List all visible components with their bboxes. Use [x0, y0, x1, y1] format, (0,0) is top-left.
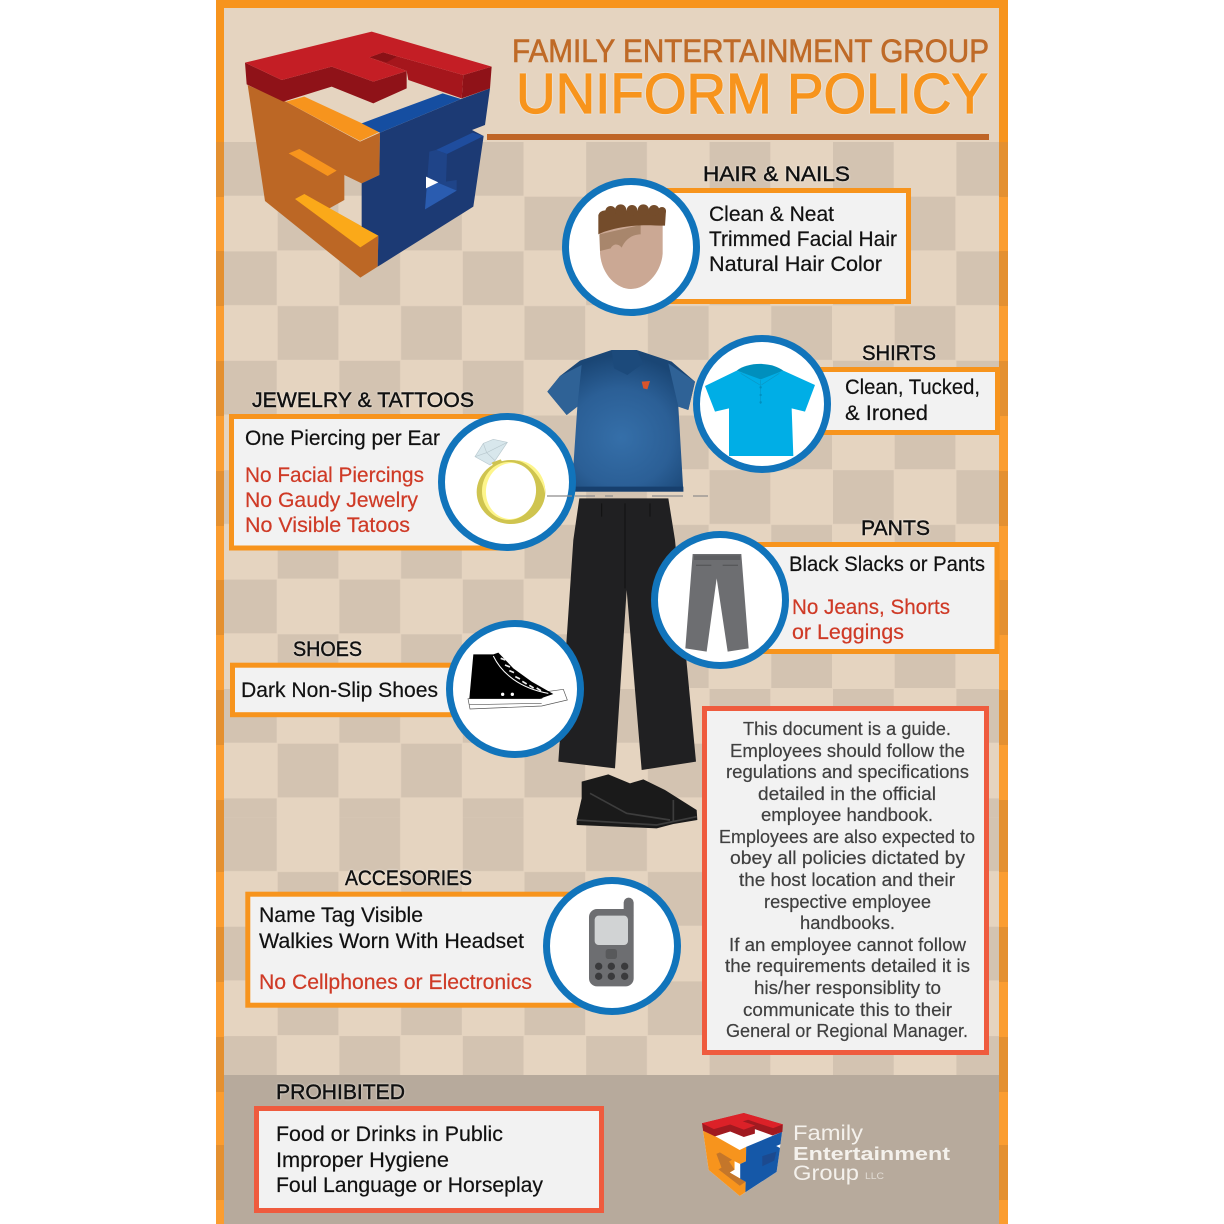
logo mark [702, 1113, 783, 1196]
panel: jewelry & tattoos [232, 388, 572, 548]
heading: PANTS [861, 516, 930, 540]
heading: SHOES [293, 637, 362, 661]
guide text: Employees should follow the [730, 740, 965, 761]
text: Improper Hygiene [276, 1148, 449, 1172]
text [259, 903, 532, 994]
text: Trimmed Facial Hair [709, 227, 897, 251]
text: & Ironed [845, 401, 928, 425]
page background [216, 0, 1008, 1224]
text [845, 375, 980, 425]
text [245, 426, 440, 537]
text: No Jeans, Shorts [792, 595, 950, 619]
guide text: Employees are also expected to [719, 826, 975, 847]
logo: FEG cube [245, 32, 492, 278]
heading: HAIR & NAILS [703, 162, 850, 186]
guide text: obey all policies dictated by [730, 847, 966, 868]
ring pointer line [547, 495, 572, 497]
guide text: This document is a guide. [743, 718, 951, 739]
text [709, 202, 897, 276]
wordmark [793, 1122, 950, 1185]
photo: polo shirt [547, 350, 695, 492]
text: Walkies Worn With Headset [259, 929, 524, 953]
title line 2: UNIFORM POLICY [516, 62, 988, 126]
wordmark: Family [793, 1122, 864, 1145]
guide text: the host location and their [739, 869, 955, 890]
photo: dashed line [575, 495, 708, 497]
icon: ring [442, 416, 572, 548]
heading: PROHIBITED [276, 1080, 405, 1104]
guide text: If an employee cannot follow [729, 934, 967, 955]
text: Natural Hair Color [709, 252, 882, 276]
panel: accessories [248, 866, 678, 1012]
box [704, 708, 986, 1052]
title [512, 33, 989, 126]
panel: shoes [232, 624, 580, 754]
guide text: respective employee [764, 891, 931, 912]
panel: shirts [696, 338, 998, 470]
box [642, 190, 908, 302]
panel: pants [654, 516, 997, 666]
box [256, 1108, 602, 1210]
box [232, 416, 508, 548]
wordmark: LLC [865, 1171, 885, 1181]
text: Dark Non-Slip Shoes [241, 678, 438, 702]
text: Clean, Tucked, [845, 375, 980, 399]
title line 1: FAMILY ENTERTAINMENT GROUP [512, 33, 989, 69]
panel: guide note [704, 708, 986, 1052]
guide text: detailed in the official [758, 783, 936, 804]
wordmark: Group [793, 1162, 859, 1185]
icon: sneaker [450, 624, 580, 754]
box [248, 894, 598, 1005]
icon: head [566, 182, 696, 312]
panel: hair & nails [566, 162, 908, 312]
guide text: handbooks. [800, 912, 895, 933]
guide text: communicate this to their [743, 999, 952, 1020]
text: One Piercing per Ear [245, 426, 440, 450]
guide text: his/her responsiblity to [754, 977, 941, 998]
guide text [719, 718, 975, 1041]
text: Name Tag Visible [259, 903, 423, 927]
text: Foul Language or Horseplay [276, 1173, 543, 1197]
guide text: the requirements detailed it is [725, 955, 970, 976]
text: No Facial Piercings [245, 463, 424, 487]
icon: shirt [696, 338, 828, 470]
photo: black shoes [577, 774, 697, 828]
box [232, 665, 478, 715]
text [276, 1122, 543, 1197]
text: Clean & Neat [709, 202, 834, 226]
text: Black Slacks or Pants [789, 552, 985, 576]
wordmark: Entertainment [793, 1144, 950, 1164]
heading: JEWELRY & TATTOOS [252, 388, 474, 412]
photo: black pants [558, 498, 696, 770]
text: No Gaudy Jewelry [245, 488, 418, 512]
panel: prohibited [256, 1080, 602, 1210]
box [802, 370, 998, 432]
guide text: General or Regional Manager. [726, 1020, 968, 1041]
guide text: employee handbook. [761, 804, 933, 825]
icon: phone [546, 880, 678, 1012]
box [722, 544, 997, 652]
footer logo [702, 1113, 950, 1196]
heading: ACCESORIES [345, 866, 472, 890]
text: or Leggings [792, 620, 904, 644]
title rule [487, 134, 989, 140]
icon: pants [654, 534, 786, 666]
heading: SHIRTS [862, 341, 936, 365]
text: Food or Drinks in Public [276, 1122, 503, 1146]
text: No Visible Tatoos [245, 513, 410, 537]
text: No Cellphones or Electronics [259, 970, 532, 994]
guide text: regulations and specifications [726, 761, 969, 782]
text [789, 552, 985, 644]
